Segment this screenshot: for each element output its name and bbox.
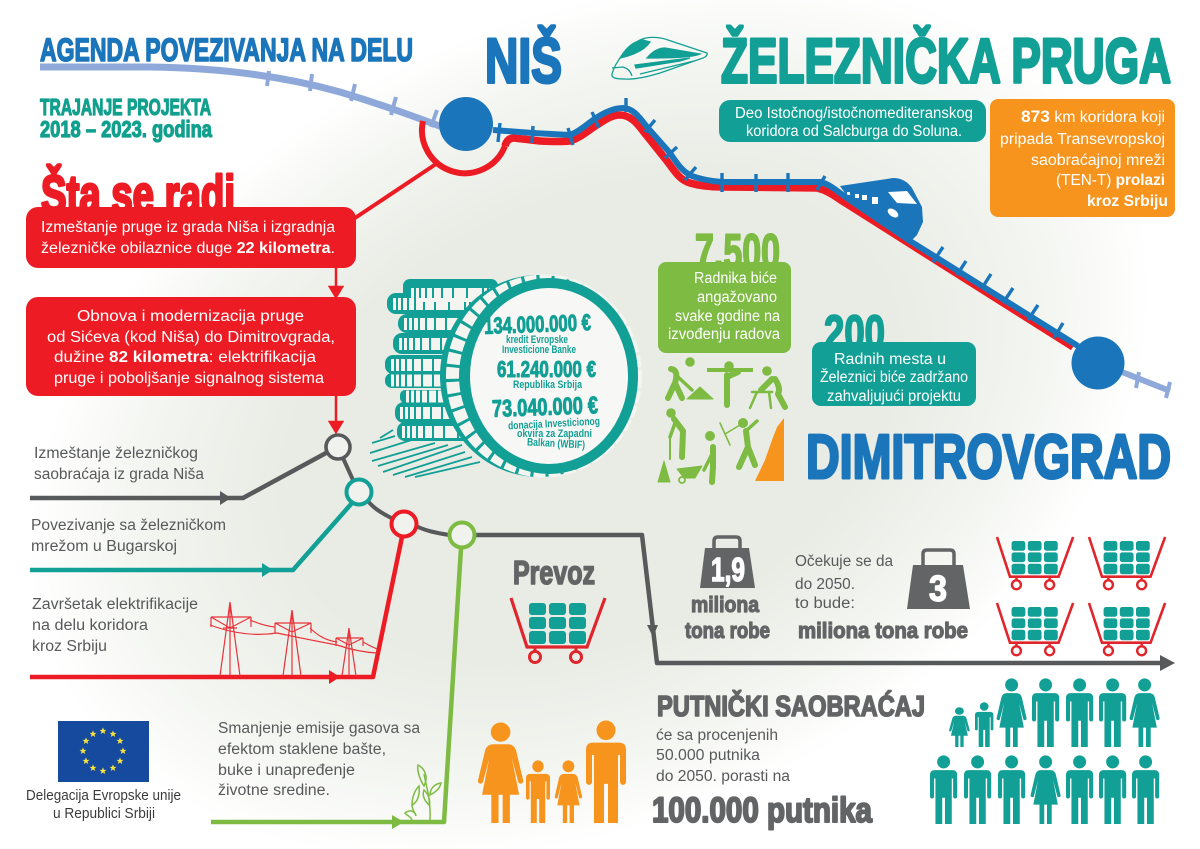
- panel: reconstruction and modernisation: od Sićeva (kod Niša) do Dimitrovgrada,: [47, 329, 335, 346]
- figure: 100.000 passengers: 100.000 putnika: [652, 791, 872, 830]
- funding figures on the coin: okvira za Zapadni: [517, 428, 592, 440]
- panel: reconstruction and modernisation: pruge i poboljšanje signalnog sistema: [54, 370, 324, 387]
- funding figures on the coin: 61.240.000 €: [497, 356, 596, 382]
- title: project duration: 2018 – 2023. godina: [40, 116, 212, 142]
- panel: 873 km of the corridor: (TEN-T) prolazi: [1056, 172, 1165, 189]
- icon: four freight carts: [997, 537, 1165, 655]
- text: completed electrification: Završetak elektrifikacije: [32, 596, 198, 613]
- panel: reconstruction and modernisation: dužine 82 kilometra : elektrifikacija: [54, 349, 316, 366]
- icon: green plant: [405, 765, 441, 820]
- text: expected by 2050: to bude:: [795, 595, 855, 612]
- title: project duration: [40, 94, 212, 142]
- panel: moving the line out of Niš: železničke obilaznice duge 22 kilometra.: [41, 240, 335, 257]
- text: EU delegation: u Republici Srbiji: [53, 806, 155, 822]
- text: lower emissions: buke i unapređenje: [218, 762, 355, 779]
- station marker: Dimitrovgrad: [1072, 336, 1124, 390]
- panel: workers per year: svake godine na: [675, 308, 780, 325]
- text: passenger estimate: [656, 727, 790, 785]
- icon: freight cart: [511, 598, 605, 662]
- funding figures on the coin: 134.000.000 €: [484, 309, 592, 339]
- icon: teal train: [612, 37, 707, 79]
- figure: 7.500: 7.500: [695, 224, 780, 280]
- icon: weight 3: [907, 550, 970, 609]
- red route under the track: [505, 115, 1073, 347]
- panel: 873 km of the corridor: saobraćajnoj mreži: [1031, 152, 1165, 169]
- text: lower emissions: životne sredine.: [218, 782, 330, 799]
- text: 1.9 million tonnes: miliona: [691, 592, 760, 617]
- panel: reconstruction and modernisation: Obnova i modernizacija pruge: [77, 308, 304, 325]
- text: EU delegation: [26, 788, 181, 822]
- panel: retained jobs: zahvaljujući projektu: [827, 388, 961, 405]
- heading: what is being done: Šta se radi: [41, 164, 235, 225]
- text: completed electrification: na delu koridora: [32, 617, 148, 634]
- text: completed electrification: kroz Srbiju: [32, 638, 107, 655]
- benefit network: grey branch: [30, 453, 326, 505]
- panel: reconstruction and modernisation: [26, 297, 356, 396]
- panel: workers per year: [658, 262, 791, 353]
- arrow into network nodes: [330, 396, 342, 432]
- connector from Niš ring to first red box: [355, 164, 436, 218]
- funding figures on the coin: donacija Investicionog: [508, 416, 600, 432]
- railway track west of Niš: [40, 67, 445, 128]
- text: 1.9 million tonnes: [685, 592, 770, 643]
- text: expected by 2050: [795, 553, 893, 612]
- node: green: [450, 522, 474, 548]
- panel: workers per year: Radnika biće: [694, 270, 777, 287]
- text: expected by 2050: do 2050.: [795, 576, 855, 593]
- text: EU delegation: Delegacija Evropske unije: [26, 788, 181, 804]
- funding figures on the coin: [484, 309, 600, 452]
- icon: EU flag: [58, 721, 149, 782]
- text: passenger estimate: do 2050. porasti na: [656, 768, 790, 785]
- panel: moving the line out of Niš: Izmeštanje pruge iz grada Niša i izgradnja: [41, 219, 335, 236]
- main grey arrow: future transport: [474, 535, 1175, 671]
- heading: freight transport: Prevoz: [513, 554, 595, 591]
- node: grey: [326, 435, 350, 459]
- icon: stack of coins: [370, 275, 638, 477]
- panel: corridor description: Deo Istočnog/istočnomediteranskog: [735, 105, 973, 122]
- route bypass ring around Niš: [422, 121, 505, 173]
- funding figures on the coin: kredit Evropske: [506, 334, 568, 346]
- benefit network: green branch: [211, 548, 461, 829]
- title: Agenda povezivanja na delu: AGENDA POVEZIVANJA NA DELU: [40, 32, 413, 68]
- railway track: [493, 98, 1078, 346]
- panel: 873 km of the corridor: pripada Transevropskoj: [1000, 131, 1165, 148]
- node: red: [392, 512, 416, 536]
- text: completed electrification: [32, 596, 198, 655]
- benefit network: teal branch: [30, 503, 352, 577]
- icon: blue train on the track: [840, 178, 923, 242]
- icon: construction workers: [658, 357, 785, 483]
- icon: weight 3: 3: [929, 568, 947, 609]
- funding figures on the coin: Investicione Banke: [502, 344, 576, 356]
- benefit network: red branch: [30, 537, 402, 684]
- panel: retained jobs: [812, 342, 976, 406]
- icon: weight 1,9: [700, 537, 755, 588]
- text: connection with Bulgaria: [31, 517, 226, 555]
- panel: workers per year: izvođenju radova: [668, 326, 780, 343]
- panel: 873 km of the corridor: kroz Srbiju: [1087, 193, 1168, 210]
- text: lower emissions: Smanjenje emisije gasova sa: [218, 720, 420, 737]
- city heading: Niš: NIŠ: [485, 26, 562, 96]
- icon: electricity pylons: [210, 602, 377, 676]
- text: connection with Bulgaria: Povezivanje sa železničkom: [31, 517, 226, 534]
- text: connection with Bulgaria: mrežom u Bugarskoj: [31, 538, 177, 555]
- panel: 873 km of the corridor: [990, 99, 1175, 217]
- panel: retained jobs: Železnici biće zadržano: [820, 369, 968, 386]
- benefit network: connectors between nodes: [343, 458, 449, 535]
- figure: 200: 200: [824, 307, 885, 360]
- icon: orange rock face: [755, 418, 784, 481]
- text: lower emissions: efektom staklene bašte,: [218, 741, 386, 758]
- funding figures on the coin: Balkan (WBIF): [527, 436, 586, 452]
- funding figures on the coin: Republika Srbija: [513, 379, 583, 391]
- text: moving traffic out of Niš: [34, 445, 204, 483]
- text: passenger estimate: će sa procenjenih: [656, 727, 778, 744]
- text: 1.9 million tonnes: tona robe: [685, 618, 770, 643]
- icon: teal passenger group: [930, 678, 1160, 824]
- station marker: Niš: [439, 97, 493, 151]
- text: moving traffic out of Niš: saobraćaja iz grada Niša: [34, 466, 204, 483]
- text: expected by 2050: Očekuje se da: [795, 553, 893, 570]
- text: lower emissions: [218, 720, 420, 799]
- arrow between red boxes: [330, 268, 342, 297]
- heading: passenger transport: PUTNIČKI SAOBRAĆAJ: [657, 690, 925, 723]
- railway track east of Dimitrovgrad: [1122, 372, 1170, 398]
- panel: workers per year: angažovano: [697, 289, 777, 306]
- funding figures on the coin: 73.040.000 €: [492, 392, 598, 423]
- panel: corridor description: [719, 100, 986, 142]
- title: project duration: TRAJANJE PROJEKTA: [40, 94, 211, 120]
- icon: weight 1,9: 1,9: [711, 551, 745, 588]
- text: 3 million tonnes: miliona tona robe: [798, 618, 968, 643]
- panel: retained jobs: Radnih mesta u: [834, 351, 946, 368]
- text: passenger estimate: 50.000 putnika: [656, 747, 760, 764]
- panel: 873 km of the corridor: 873 km koridora koji: [1021, 107, 1165, 126]
- node: teal: [346, 480, 372, 504]
- panel: moving the line out of Niš: [26, 207, 356, 268]
- panel: corridor description: koridora od Salcburga do Soluna.: [746, 123, 962, 140]
- icon: orange family: [478, 721, 626, 823]
- text: moving traffic out of Niš: Izmeštanje železničkog: [34, 445, 198, 462]
